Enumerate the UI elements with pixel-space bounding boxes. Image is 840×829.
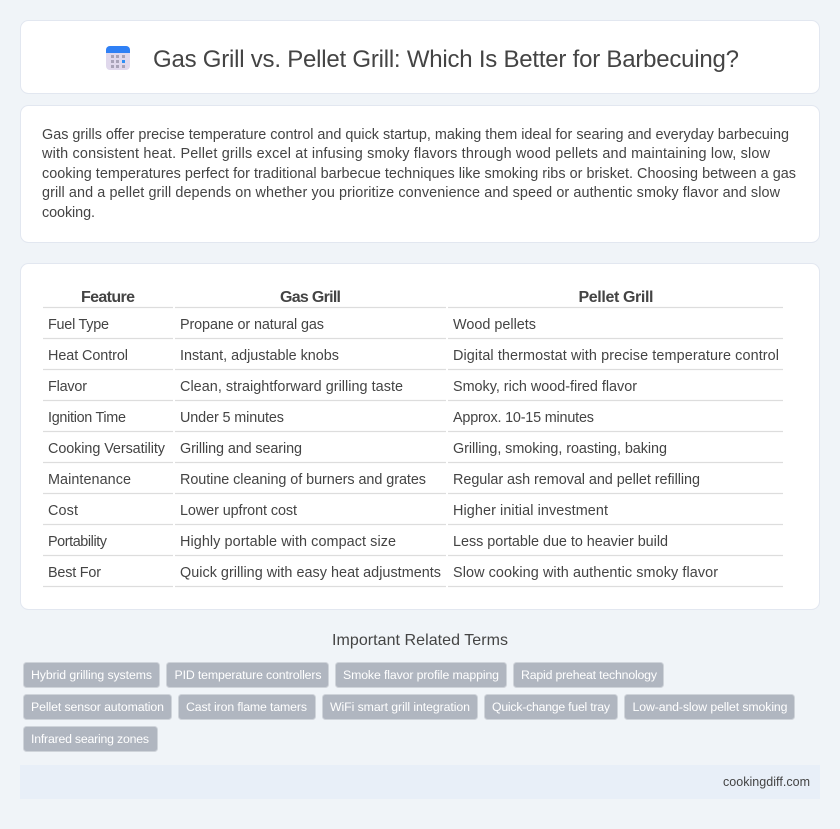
tags: related terms: Quick-change fuel tray: [492, 700, 611, 714]
tags: related terms: Hybrid grilling systems: [31, 668, 152, 682]
footer: cookingdiff.com: [723, 775, 810, 789]
row: flavor: Smoky, rich wood-fired flavor: [453, 379, 637, 395]
row: portability: Less portable due to heavier build: [453, 534, 668, 550]
intro paragraph: grill and a pellet grill depends on whether you prioritize convenience and speed or authentic smoky flavor and slow: [42, 185, 781, 201]
tags: related terms: Low-and-slow pellet smoking: [632, 700, 788, 714]
tags: related terms: Infrared searing zones: [31, 732, 149, 746]
intro paragraph: with consistent heat. Pellet grills excel at infusing smoky flavors through wood pellets and maintaining low, slow: [41, 146, 771, 162]
row: cooking versatility: Grilling, smoking, roasting, baking: [453, 441, 667, 457]
row: flavor: Flavor: [48, 379, 87, 395]
title: Gas Grill vs. Pellet Grill: Which Is Better for Barbecuing?: [153, 46, 739, 73]
row: best for: Quick grilling with easy heat adjustments: [180, 565, 441, 581]
tags: related terms: [24, 662, 794, 752]
tags: related terms: PID temperature controllers: [174, 668, 322, 682]
row: fuel type: [48, 317, 536, 333]
tags: related terms: Cast iron flame tamers: [186, 700, 307, 714]
row: heat control: Digital thermostat with precise temperature control: [453, 348, 779, 364]
tags: related terms: Rapid preheat technology: [521, 668, 658, 682]
heading: related terms: Important Related Terms: [332, 632, 508, 649]
row: maintenance: Maintenance: [48, 472, 131, 488]
row: fuel type: Propane or natural gas: [180, 317, 324, 333]
intro paragraph: cooking.: [42, 205, 95, 221]
tags: related terms: Smoke flavor profile mapping: [343, 668, 499, 682]
table header: Pellet Grill: [578, 289, 654, 306]
row: cost: Lower upfront cost: [180, 503, 297, 519]
tags: related terms: WiFi smart grill integration: [330, 700, 470, 714]
row: portability: [48, 534, 668, 550]
row: cooking versatility: Cooking Versatility: [48, 441, 166, 457]
icon: calendar: [106, 46, 130, 70]
panel: intro text: [20, 106, 820, 242]
table header: Gas Grill: [280, 289, 341, 306]
row: cost: Higher initial investment: [453, 503, 608, 519]
table header: [81, 289, 654, 306]
row: flavor: Clean, straightforward grilling taste: [180, 379, 403, 395]
panel: comparison table: [20, 264, 820, 610]
intro paragraph: Gas grills offer precise temperature control and quick startup, making them ideal for searing and everyday barbecuing: [42, 127, 789, 143]
row: cost: [48, 503, 608, 519]
row: maintenance: [48, 472, 700, 488]
row: portability: Highly portable with compact size: [180, 534, 396, 550]
row: heat control: Heat Control: [48, 348, 128, 364]
panel: title header: [20, 20, 820, 94]
row: ignition time: Ignition Time: [48, 410, 126, 426]
tags: related terms: Pellet sensor automation: [31, 700, 164, 714]
row: cost: Cost: [48, 503, 78, 519]
intro paragraph: [41, 127, 796, 221]
row: heat control: Instant, adjustable knobs: [180, 348, 339, 364]
row: flavor: [48, 379, 637, 395]
row: best for: Slow cooking with authentic smoky flavor: [453, 565, 718, 581]
footer: [20, 765, 820, 799]
table header: Feature: [81, 289, 135, 306]
row: maintenance: Regular ash removal and pellet refilling: [453, 472, 700, 488]
row: cooking versatility: [48, 441, 667, 457]
row: ignition time: Under 5 minutes: [180, 410, 284, 426]
row: ignition time: [48, 410, 594, 426]
intro paragraph: cooking temperatures perfect for traditional barbecue techniques like smoking ribs or brisket. Choosing between a gas: [42, 166, 796, 182]
row: fuel type: Wood pellets: [453, 317, 536, 333]
row: maintenance: Routine cleaning of burners and grates: [180, 472, 426, 488]
row: cooking versatility: Grilling and searing: [180, 441, 302, 457]
row: heat control: [48, 348, 779, 364]
row: best for: [48, 565, 718, 581]
row: portability: Portability: [48, 534, 108, 550]
row: best for: Best For: [48, 565, 101, 581]
row: fuel type: Fuel Type: [48, 317, 109, 333]
row: ignition time: Approx. 10-15 minutes: [453, 410, 594, 426]
